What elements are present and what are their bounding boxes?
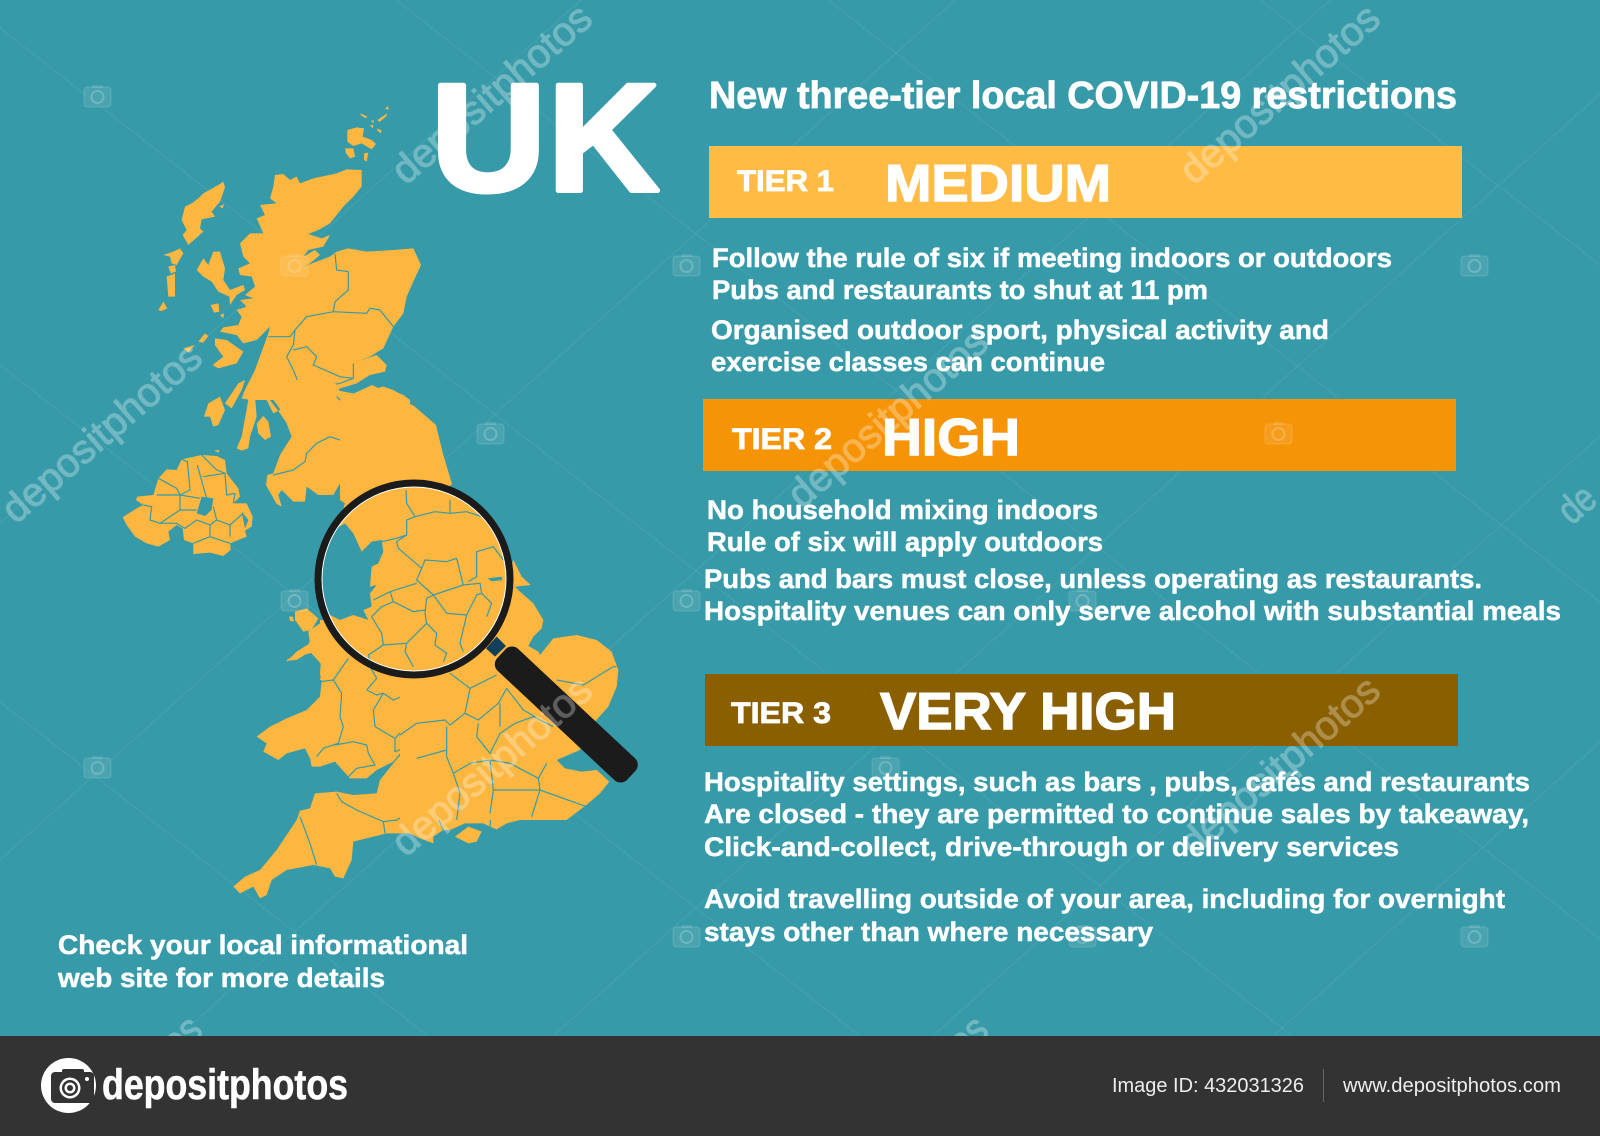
handle connector	[486, 637, 506, 657]
panel: tier 1 banner: MEDIUM	[885, 155, 1111, 213]
map: Anglesey and north Wales	[286, 607, 410, 680]
watermarks: depositphotos	[383, 0, 601, 193]
panel: tier 3 banner	[705, 674, 1458, 746]
map: Isle of Wight	[455, 827, 482, 843]
text block: tier 2 rules: Hospitality venues can only serve alcohol with substantial meals	[704, 596, 1561, 626]
text block: tier 3 rules: stays other than where necessary	[704, 917, 1153, 947]
text block: check local website note	[57, 930, 468, 993]
text block: tier 3 rules: Click-and-collect, drive-through or delivery services	[704, 832, 1399, 862]
text block: tier 1 rules: exercise classes can continue	[711, 347, 1105, 377]
map: Northern Ireland	[123, 455, 253, 556]
text block: tier 3 rules: Are closed - they are permitted to continue sales by takeaway,	[704, 799, 1529, 829]
map: eastern English borders	[400, 667, 617, 820]
map: southern Scotland	[260, 380, 410, 508]
map: Islay, Jura, Kintyre and Arran	[204, 380, 271, 453]
text block: check local website note: Check your local informational	[58, 930, 468, 960]
text block: tier 3 rules	[704, 767, 1530, 947]
lens ring	[320, 486, 508, 672]
watermarks: os	[939, 1007, 997, 1065]
watermarks: depositphotos	[1171, 0, 1389, 193]
map: Northern Irish district borders	[143, 455, 243, 543]
panel: tier 2 banner: HIGH	[882, 409, 1020, 467]
text block: tier 2 rules: Pubs and bars must close, unless operating as restaurants.	[704, 564, 1482, 594]
main heading: UK	[431, 52, 659, 224]
map: northern England	[340, 385, 452, 540]
watermark camera icons	[84, 85, 1488, 947]
website URL: www.depositphotos.com	[1342, 1075, 1561, 1097]
depositphotos wordmark: depositphotos	[102, 1061, 348, 1109]
text block: tier 1 rules: Organised outdoor sport, physical activity and	[711, 315, 1329, 345]
text block: tier 1 rules	[711, 243, 1392, 377]
subtitle: New three-tier local COVID-19 restrictions	[709, 75, 1457, 117]
panel: tier 2 banner	[703, 399, 1456, 471]
map: southern Scotland and Cumbria borders	[273, 397, 408, 537]
main heading: UK: K	[548, 52, 659, 224]
map: Wales and southern England	[233, 620, 520, 898]
map: eastern England	[400, 560, 618, 820]
map: mainland Scotland	[220, 169, 421, 413]
text block: tier 2 rules	[704, 495, 1561, 626]
panel: tier 3 banner: VERY HIGH	[880, 683, 1176, 741]
text block: check local website note: web site for more details	[57, 963, 385, 993]
map of the UK	[123, 106, 618, 898]
text block: tier 2 rules: No household mixing indoors	[707, 495, 1098, 525]
map: Lough Neagh	[197, 497, 248, 528]
text block: tier 3 rules: Hospitality settings, such as bars , pubs, cafés and restaurants	[704, 767, 1530, 797]
map: Welsh and southern English borders	[300, 658, 520, 865]
handle	[491, 643, 642, 786]
watermarks: os	[153, 1007, 211, 1065]
icon: depositphotos camera logo	[41, 1058, 96, 1113]
watermarks: depositphotos	[779, 320, 997, 517]
text block: tier 3 rules: Avoid travelling outside of your area, including for overnight	[704, 884, 1505, 914]
map: Outer Hebrides and inner isles	[158, 182, 245, 368]
map: Scottish regional borders	[268, 254, 393, 400]
image ID: Image ID: 432031326	[1112, 1075, 1304, 1097]
panel: tier 1 banner: TIER 1	[737, 165, 834, 198]
map: Orkney and Shetland islands	[345, 106, 388, 162]
watermarks: depositphotos	[383, 668, 601, 865]
text block: tier 1 rules: Pubs and restaurants to shut at 11 pm	[712, 275, 1208, 305]
magnifying glass	[317, 483, 642, 786]
main heading: UK: U	[431, 52, 546, 224]
text block: tier 2 rules: Rule of six will apply outdoors	[707, 527, 1103, 557]
magnified lens content	[323, 490, 506, 667]
text block: tier 1 rules: Follow the rule of six if meeting indoors or outdoors	[712, 243, 1392, 273]
panel: tier 2 banner: TIER 2	[732, 423, 832, 456]
footer bar	[0, 1036, 1600, 1136]
panel: tier 1 banner	[709, 146, 1462, 218]
panel: tier 3 banner: TIER 3	[731, 697, 831, 730]
watermarks: depositphotos	[1171, 668, 1389, 865]
